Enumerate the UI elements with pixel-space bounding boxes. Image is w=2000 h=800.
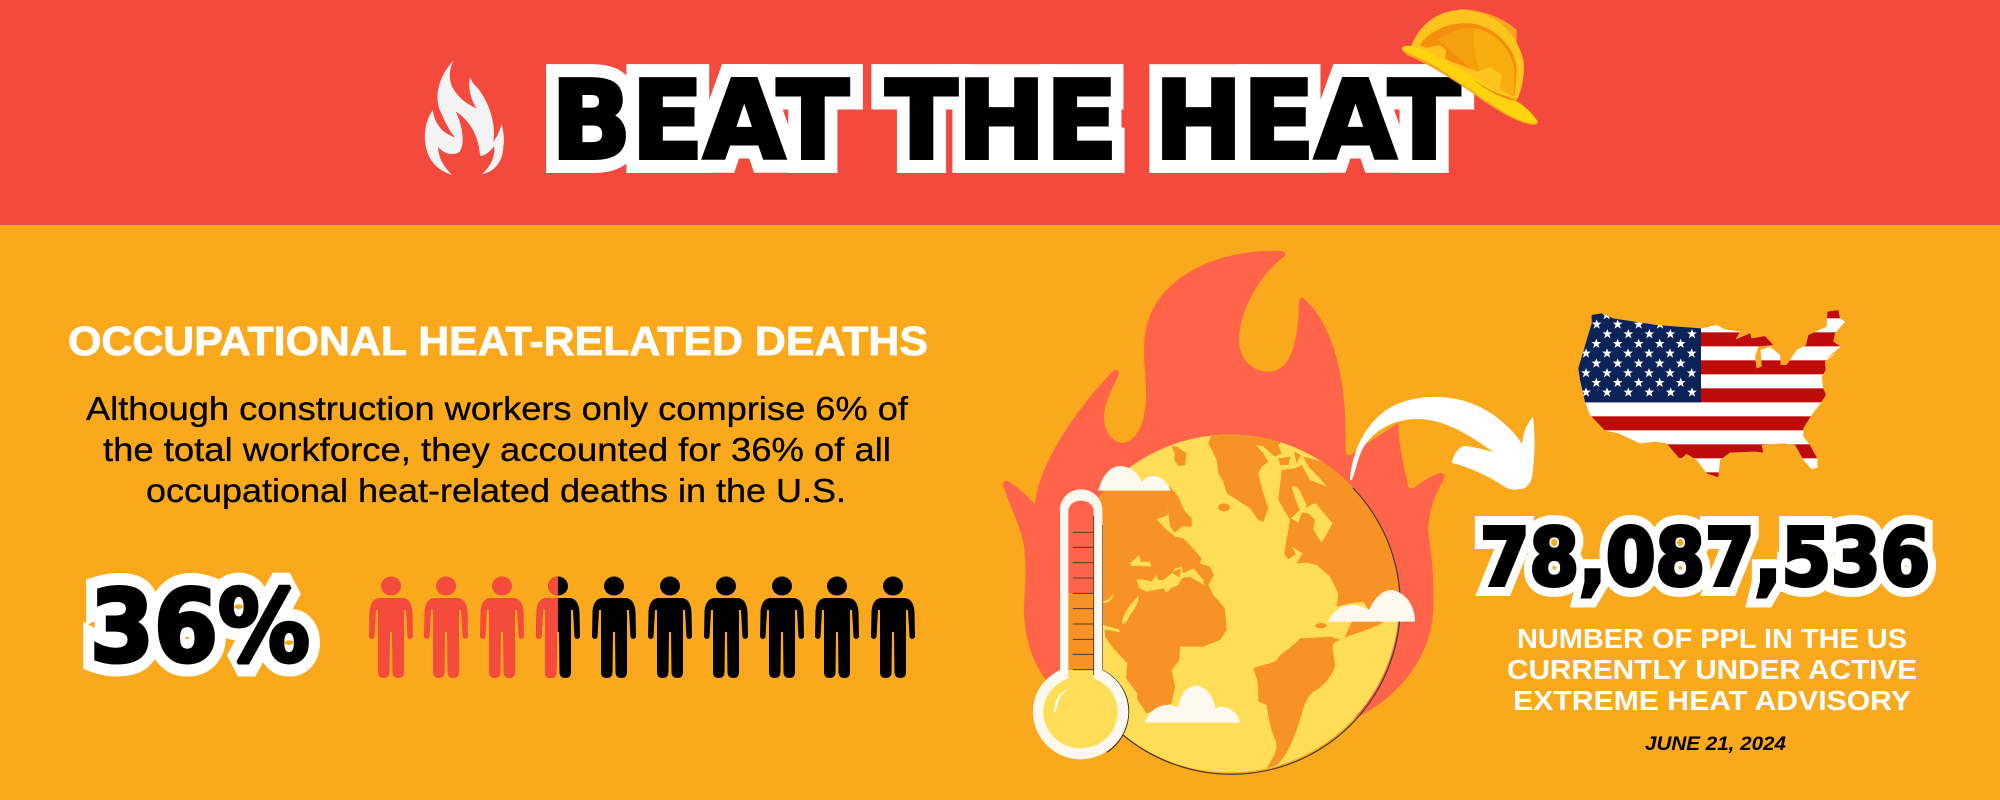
body text: occupational heat-related deaths in the U.S. <box>146 472 846 509</box>
icon: hard hat <box>1402 9 1538 125</box>
date: JUNE 21, 2024 <box>1645 733 1786 755</box>
icon: flame <box>425 61 504 175</box>
stat: 36%: 36% <box>90 568 310 685</box>
illustration: globe on fire with thermometer <box>1003 251 1444 774</box>
title: BEAT THE HEAT <box>551 59 1460 184</box>
body text <box>86 390 909 509</box>
thermometer <box>1033 489 1129 759</box>
map: USA flag <box>1578 310 1845 478</box>
stripes <box>1578 310 1840 478</box>
body text: the total workforce, they accounted for 36% of all <box>103 431 891 468</box>
caption: people under heat advisory: EXTREME HEAT ADVISORY <box>1513 685 1911 716</box>
header band <box>0 0 2000 225</box>
globe <box>1061 434 1399 772</box>
stars <box>1581 310 1697 397</box>
clouds <box>1098 466 1415 723</box>
flames <box>1003 251 1444 719</box>
heading: occupational heat-related deaths: OCCUPATIONAL HEAT-RELATED DEATHS <box>68 318 928 364</box>
title: BEAT THE HEAT <box>551 59 1460 184</box>
continents <box>1083 430 1407 768</box>
globe outline <box>1123 488 1400 774</box>
caption: people under heat advisory: CURRENTLY UNDER ACTIVE <box>1507 654 1917 685</box>
stat: 78,087,536: 78,087,536 <box>1480 512 1930 604</box>
caption: people under heat advisory: NUMBER OF PPL IN THE US <box>1517 623 1907 654</box>
stat: 36%: 36% <box>90 568 310 685</box>
arrow <box>1350 397 1535 490</box>
canton <box>1578 313 1701 402</box>
pictogram: ten workers, 3.5 highlighted <box>369 576 915 678</box>
stat: 78,087,536: 78,087,536 <box>1480 512 1930 604</box>
body text: Although construction workers only comprise 6% of <box>86 390 909 427</box>
caption: people under heat advisory <box>1507 623 1917 716</box>
